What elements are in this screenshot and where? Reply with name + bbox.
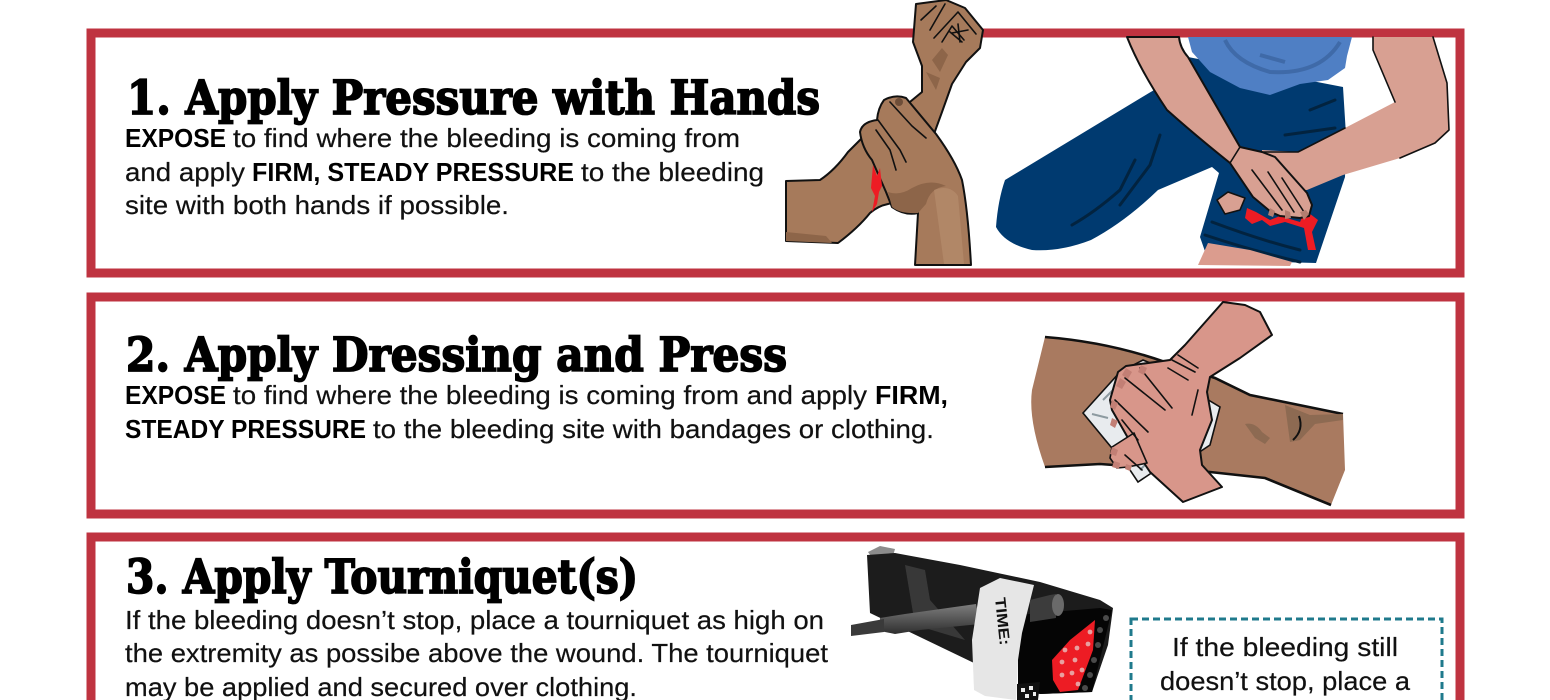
text block: step 3 instructions: the extremity as possibe above the wound. The tourniquet [125,638,829,668]
text block: step 1 instructions: EXPOSE [125,123,226,153]
panel 1 border [91,33,1460,273]
heading: step 1: 1. Apply Pressure with Hands [127,71,820,126]
text block: step 1 instructions: FIRM, STEADY PRESSURE [252,157,574,187]
callout: if the bleeding still doesn't stop: doesn’t stop, place a [1160,666,1411,696]
text block: step 2 instructions: STEADY PRESSURE [125,414,366,444]
panel: step 2 apply dressing and press [91,297,1460,514]
callout: if the bleeding still doesn't stop: If the bleeding still [1172,632,1398,662]
text block: step 2 instructions: FIRM, [875,380,948,410]
text block: step 2 instructions [125,380,948,444]
panel: step 1 apply pressure with hands [91,0,1460,273]
heading: step 2: 2. Apply Dressing and Press [126,328,787,383]
icon: hands pressing dressing on arm [1031,302,1345,505]
icon: brown arm with hand pressing wound [786,0,983,265]
text block: step 1 instructions [125,123,764,220]
panel: step 3 apply tourniquets [91,537,1460,700]
icon: person pressing on bleeding thigh [996,37,1449,266]
text block: step 3 instructions [125,605,829,700]
text block: step 1 instructions: site with both hands if possible. [125,190,509,220]
text block: step 1 instructions: and apply [125,157,245,187]
text block: step 1 instructions: to find where the bleeding is coming from [233,123,740,153]
text block: step 3 instructions: If the bleeding doesn’t stop, place a tourniquet as high on [125,605,824,635]
heading: step 3: 3. Apply Tourniquet(s) [126,550,638,605]
icon: tourniquet [851,546,1113,700]
text block: step 2 instructions: to the bleeding site with bandages or clothing. [373,414,934,444]
panel 2 border [91,297,1460,514]
text block: step 2 instructions: to find where the bleeding is coming from and apply [233,380,867,410]
panel 3 border [91,537,1460,700]
text block: step 2 instructions: EXPOSE [125,380,226,410]
callout: if the bleeding still doesn't stop [1131,619,1442,700]
icon: tourniquet: TIME: [991,597,1013,646]
text block: step 1 instructions: to the bleeding [581,157,764,187]
